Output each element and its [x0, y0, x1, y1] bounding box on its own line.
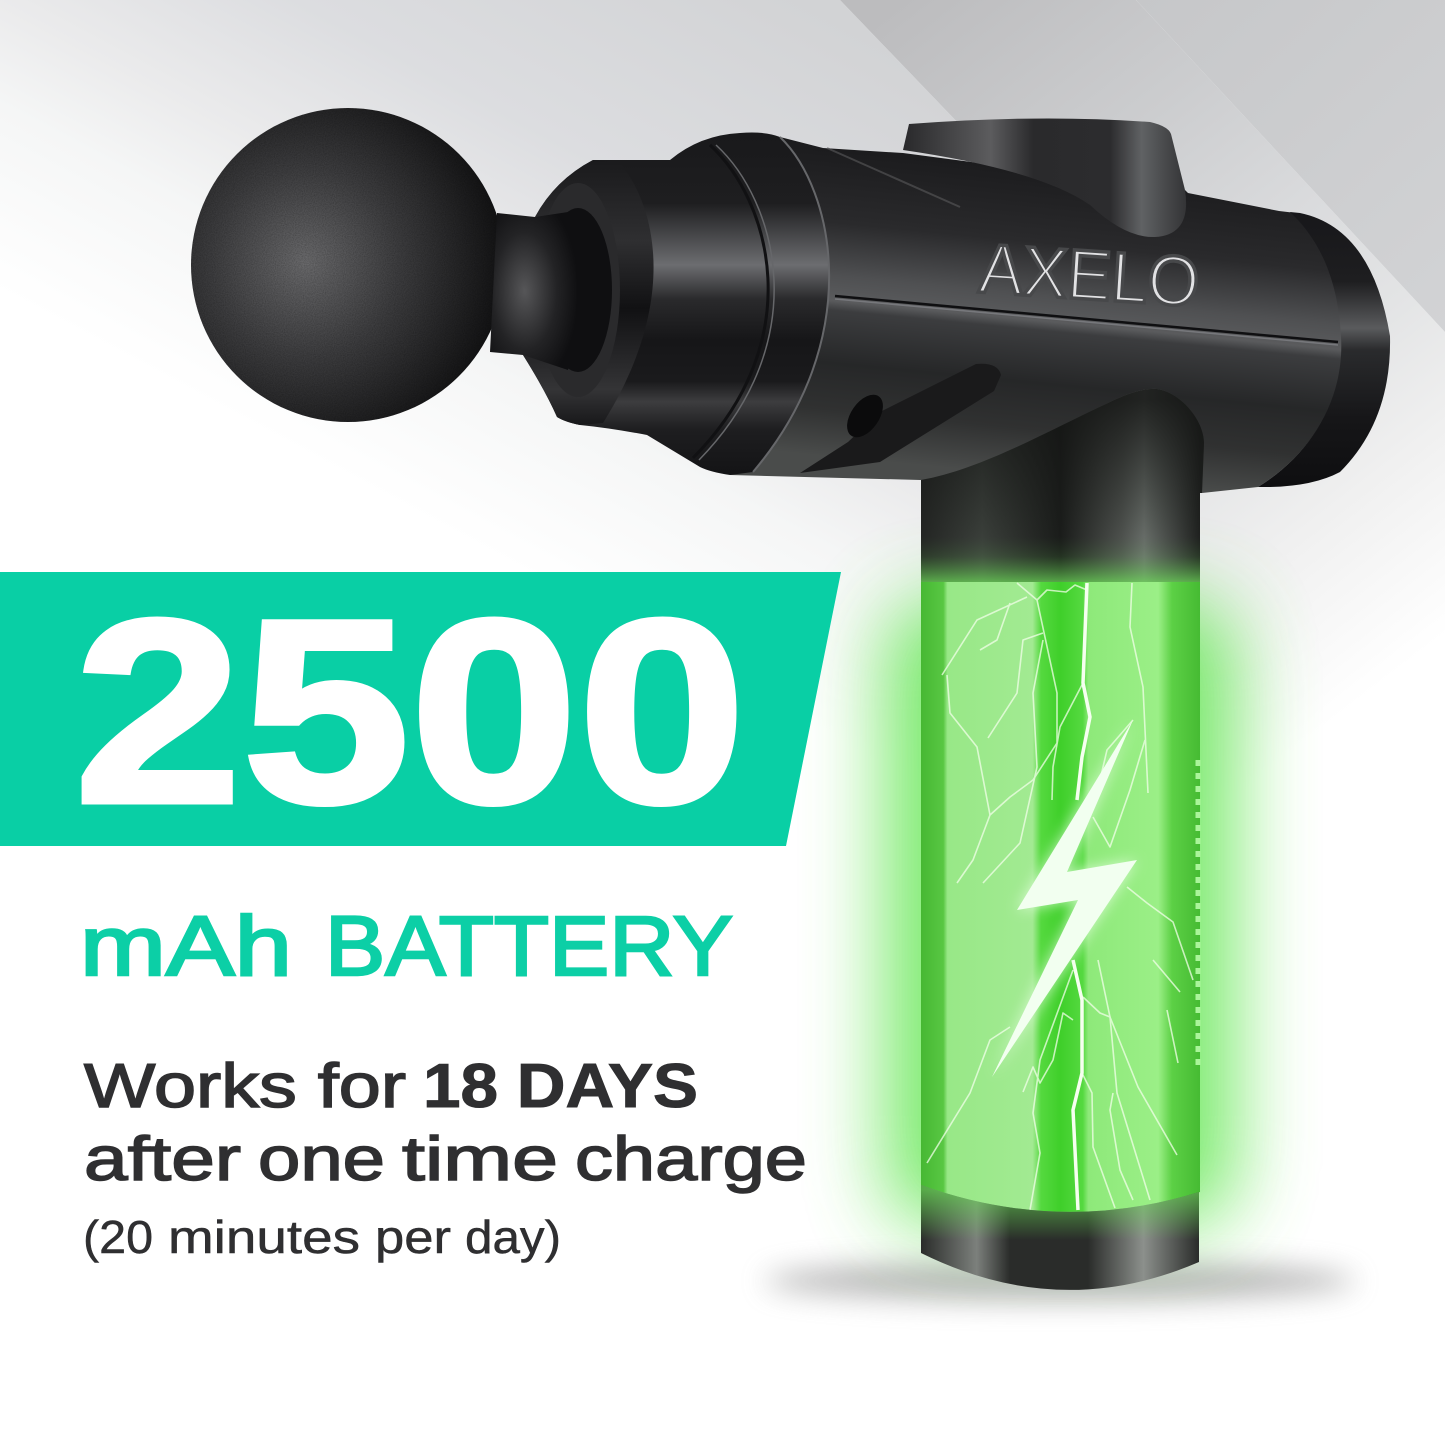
description line 1: Works for	[84, 1052, 406, 1121]
main lightning veins	[1073, 583, 1090, 1210]
side hole	[840, 388, 890, 444]
footnote: (20	[83, 1211, 153, 1263]
headline number: 2500	[74, 565, 746, 858]
subheading	[80, 899, 733, 993]
body seam	[835, 296, 1338, 345]
footnote: day)	[465, 1211, 561, 1263]
barrel	[521, 132, 829, 475]
footnote: minutes	[168, 1211, 360, 1263]
glowing battery	[921, 582, 1200, 1212]
description line 2: one	[258, 1125, 385, 1194]
subheading: BATTERY	[325, 899, 733, 993]
collar hole	[544, 208, 612, 372]
subheading: mAh	[80, 899, 292, 993]
bolt glow	[992, 720, 1137, 1077]
brand logo: AXELO	[977, 229, 1202, 321]
neck	[490, 212, 576, 370]
massage ball head	[191, 108, 505, 422]
side slot	[800, 364, 1001, 473]
grip top section	[921, 389, 1204, 583]
description line 2: charge	[575, 1125, 807, 1194]
battery end cap	[921, 1185, 1199, 1290]
footnote: per	[375, 1211, 451, 1263]
lightning veins	[927, 583, 1193, 1210]
barrel ring lines	[693, 137, 829, 472]
rear cap	[1258, 212, 1390, 487]
footnote	[83, 1211, 561, 1263]
description line 1: 18 DAYS	[423, 1052, 698, 1121]
main body	[730, 137, 1345, 493]
serrated battery edge	[1196, 760, 1200, 1070]
lightning bolt icon	[992, 720, 1137, 1077]
massage gun	[191, 108, 1390, 1290]
front collar	[521, 160, 654, 425]
collar ring	[536, 183, 620, 397]
description line 1	[84, 1052, 698, 1121]
green battery glow	[885, 600, 1235, 1225]
description line 2: after	[84, 1125, 241, 1194]
teal banner	[0, 572, 841, 846]
description line 2: time	[402, 1125, 558, 1194]
top button	[903, 118, 1186, 237]
body facet line	[827, 148, 960, 207]
shadow below massage gun	[765, 1261, 1355, 1301]
description line 2	[84, 1125, 807, 1194]
